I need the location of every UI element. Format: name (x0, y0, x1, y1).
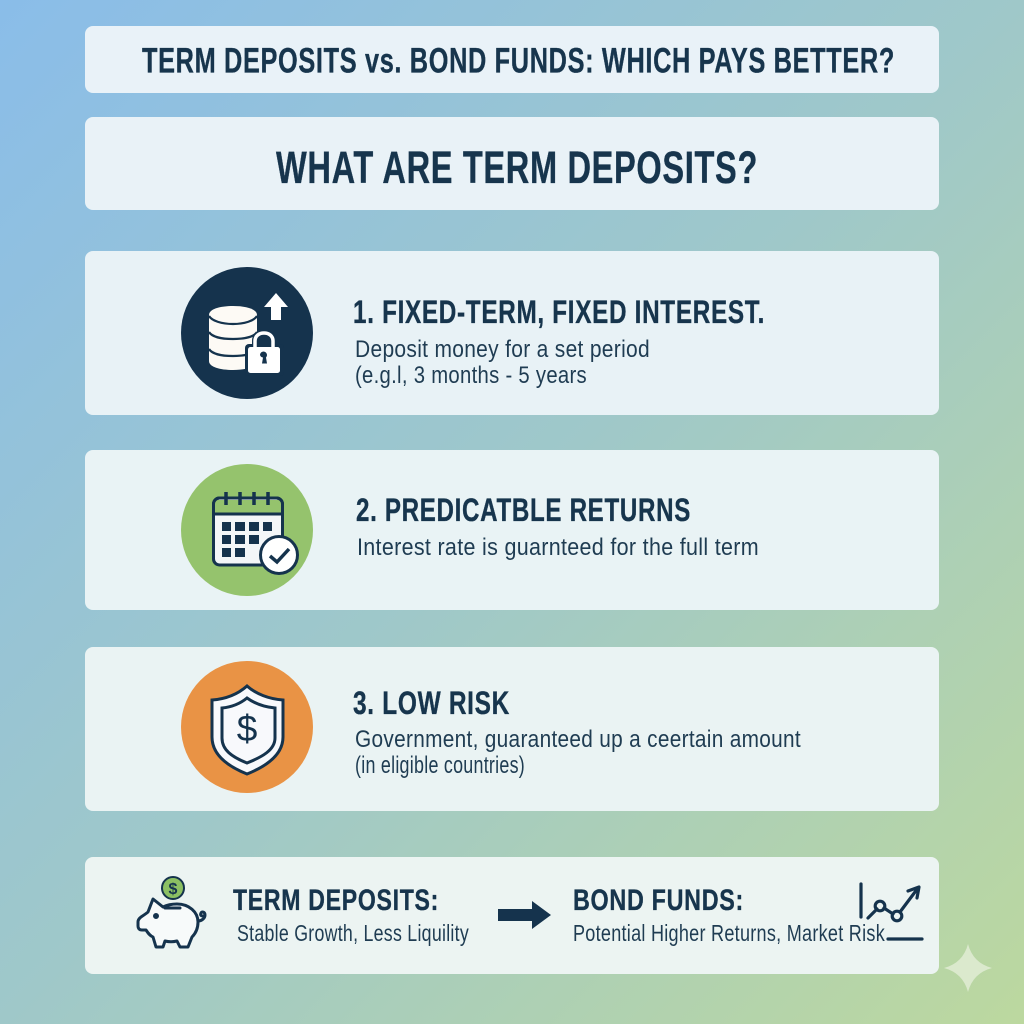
panel: section heading (85, 117, 939, 210)
heading: WHAT ARE TERM DEPOSITS? (276, 142, 758, 193)
item text 3: (in eligible countries) (355, 752, 525, 779)
summary text: term deposits: Stable Growth, Less Liquility (237, 920, 469, 946)
panel: title banner (85, 26, 939, 93)
panel: predictable returns (85, 450, 939, 610)
item text 1: (e.g.l, 3 months - 5 years (355, 362, 587, 389)
item text 3 (355, 726, 801, 779)
item text 2: Interest rate is guarnteed for the full term (357, 534, 759, 561)
summary heading: bond funds: BOND FUNDS: (573, 884, 744, 917)
item heading 3: 3. LOW RISK (353, 685, 510, 721)
icon: shield with dollar sign (181, 661, 313, 793)
icon: piggy bank with coin (138, 877, 205, 947)
icon: piggy bank with coin: $ (169, 881, 178, 898)
item heading 2: 2. PREDICATBLE RETURNS (356, 492, 691, 528)
item text 1: Deposit money for a set period (355, 336, 650, 363)
summary text: bond funds: Potential Higher Returns, Market Risk (573, 920, 885, 946)
item text 3: Government, guaranteed up a ceertain amount (355, 726, 801, 753)
icon: rising line chart (861, 884, 922, 939)
panel: low risk (85, 647, 939, 811)
icon: calendar with check (181, 464, 313, 596)
panel: fixed-term, fixed interest (85, 251, 939, 415)
icon: shield with dollar sign: $ (237, 708, 257, 749)
item text 1 (355, 336, 650, 389)
summary heading: term deposits: TERM DEPOSITS: (233, 884, 439, 917)
item heading 1: 1. FIXED-TERM, FIXED INTEREST. (353, 294, 765, 330)
icon: coins, lock and up arrow (181, 267, 313, 399)
panel: comparison summary (85, 857, 939, 974)
arrow (498, 901, 551, 929)
icon: sparkle (944, 944, 992, 992)
